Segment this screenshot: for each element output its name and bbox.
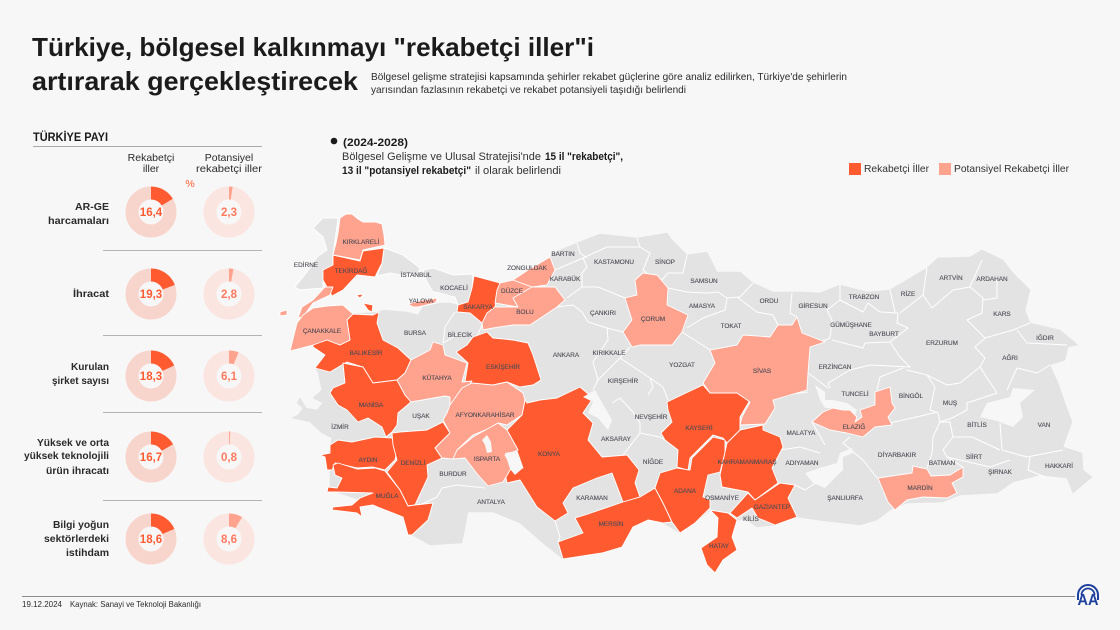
province: Kocaeli [423,268,473,305]
province name labels: MANİSA [359,400,384,409]
province: Elazığ [812,387,895,437]
province name labels: TUNCELİ [841,389,869,398]
province name labels: OSMANİYE [705,493,739,502]
callout: 2024-2028 strategy note: Bölgesel Gelişme ve Ulusal Stratejisi'nde [342,151,541,163]
province name labels: SAKARYA [463,304,494,311]
province name labels: ARTVİN [939,273,963,282]
legend: Rekabetçi İller [864,162,929,175]
row label: İhracat: İhracat [73,287,110,300]
province name labels: BİNGÖL [899,391,924,400]
lakes [482,385,1035,488]
province: Düzce [495,280,532,307]
donut: ihracat potansiyel 2,8: 2,8 [221,289,238,301]
donut: istihdam potansiyel 8,6: 8,6 [221,534,237,546]
province name labels: HAKKARİ [1045,461,1073,470]
row label: AR-GE harcamaları: harcamaları [48,215,109,227]
province name labels: UŞAK [412,413,430,420]
potential competitive provinces [280,214,963,510]
donut: AR-GE potansiyel 2,3: 2,3 [221,207,237,219]
row label: Bilgi yoğun sektörlerdeki istihdam: istihdam [66,547,109,559]
province: Aydın [320,437,397,470]
panel heading: TÜRKİYE PAYI [33,131,108,144]
column heading: potansiyel rekabetçi iller: Potansiyel [205,152,253,164]
donut: şirket potansiyel 6,1: 6,1 [221,371,238,383]
row label: Yüksek ve orta yüksek teknolojili ürün ihracatı: ürün ihracatı [46,465,109,477]
title: artırarak gerçekleştirecek [32,66,359,96]
province name labels: ESKİŞEHİR [486,362,520,371]
province: Mersin [558,488,672,559]
row label: Kurulan şirket sayısı: Kurulan [71,361,109,373]
province name labels: ERZURUM [926,340,958,347]
province name labels: GAZİANTEP [754,502,790,511]
province name labels: DÜZCE [501,287,523,295]
province name labels: ANTALYA [477,499,506,506]
province name labels: HATAY [709,543,730,550]
province name labels: KÜTAHYA [422,374,452,382]
province: Kütahya [397,342,472,405]
province: Muğla [327,463,433,535]
province name labels: TRABZON [849,294,880,301]
callout: 2024-2028 strategy note: (2024-2028) [343,137,408,149]
province name labels: KAYSERİ [685,423,713,432]
donut: istihdam potansiyel 8,6 [210,520,248,558]
province: Çanakkale Gelibolu [298,287,333,318]
title: Türkiye, bölgesel kalkınmayı "rekabetçi iller"i [32,32,594,62]
province name labels: VAN [1038,422,1051,429]
province name labels: KARAMAN [576,495,608,502]
province name labels: ELAZIĞ [843,422,865,431]
province name labels: BATMAN [929,460,955,467]
province name labels: IĞDIR [1036,333,1054,342]
province: Balıkesir [313,312,411,383]
province name labels: AFYONKARAHİSAR [456,410,515,419]
province: Mardin [878,466,963,510]
province name labels: NİĞDE [643,457,663,466]
donut: AR-GE rekabetçi 16,4: 16,4 [140,207,163,219]
province name labels: MUĞLA [376,491,399,500]
row label: Yüksek ve orta yüksek teknolojili ürün ihracatı: yüksek teknolojili [24,450,109,462]
province name labels: RİZE [901,289,915,298]
province name labels: ARDAHAN [976,276,1008,283]
province: Zonguldak [513,257,555,287]
column heading: rekabetçi iller: iller [143,163,160,175]
province name labels: ANKARA [553,352,580,359]
legend: Potansiyel Rekabetçi İller [954,162,1069,175]
panel: Türkiye payı [24,131,263,559]
province name labels: GİRESUN [798,301,828,310]
donut: şirket rekabetçi 18,3 [132,357,170,395]
province name labels: KIRIKKALE [592,350,626,357]
island: Marmara west [356,294,364,298]
province name labels: AKSARAY [601,436,632,443]
province name labels: İSTANBUL [401,270,432,279]
province name labels: AMASYA [689,303,716,310]
row label: AR-GE harcamaları [48,201,109,227]
province: Çanakkale [290,305,353,351]
donut: teknoloji rekabetçi 16,7 [132,438,170,476]
callout: 2024-2028 strategy note: 13 il "potansiyel rekabetçi" [342,165,471,177]
province name labels: KIRŞEHİR [608,376,638,385]
island: Gökçeada [280,310,287,316]
province name labels: ŞANLIURFA [827,495,863,502]
province name labels: DENİZLİ [401,458,425,467]
row label: Kurulan şirket sayısı: şirket sayısı [52,375,109,387]
province name labels: ÇANAKKALE [303,328,341,335]
province name labels: TEKİRDAĞ [335,266,367,275]
province: Çorum [623,273,688,347]
province name labels: MUŞ [943,400,957,407]
province name labels: KASTAMONU [594,259,634,266]
subtitle text block [371,72,847,96]
province name labels: ÇANKIRI [590,310,616,317]
province: Edirne [295,218,338,290]
donut: ihracat potansiyel 2,8 [210,275,248,313]
donut: şirket potansiyel 6,1 [210,357,248,395]
province name labels: ADIYAMAN [786,460,819,467]
province name labels: BAYBURT [869,331,899,338]
column heading: rekabetçi iller: Rekabetçi [128,152,174,164]
province name labels: İZMİR [331,422,349,431]
province: Gaziantep [730,483,797,525]
province name labels: BARTIN [551,251,575,258]
province name labels: GÜMÜŞHANE [830,321,872,329]
donut: ihracat rekabetçi 19,3: 19,3 [140,289,162,301]
province name labels: YOZGAT [669,362,695,369]
date and source: Kaynak: Sanayi ve Teknoloji Bakanlığı [70,600,201,609]
province name labels: AĞRI [1002,353,1018,362]
province: Kayseri [661,385,750,470]
province name labels: AYDIN [358,457,378,464]
subtitle text block: Bölgesel gelişme stratejisi kapsamında şehirler rekabet güçlerine göre analiz edilirken, Türkiye'de şehirlerin [371,72,847,83]
province name labels: BİLECİK [448,330,473,339]
title [32,32,594,96]
donut: AR-GE potansiyel 2,3 [210,193,248,231]
province name labels: TOKAT [721,323,741,330]
row label: Bilgi yoğun sektörlerdeki istihdam [44,519,109,559]
callout: 2024-2028 strategy note: il olarak belirlendi [475,165,561,177]
map base: gray provinces [292,218,1092,559]
province name labels: ORDU [760,298,779,305]
province: Yalova [408,298,438,307]
icon: AA logo: AA [1078,592,1098,609]
province name labels: SAMSUN [690,278,718,285]
donut: teknoloji potansiyel 0,8: 0,8 [221,452,238,464]
province name labels: MERSİN [599,519,624,528]
province name labels: KARS [993,311,1011,318]
province: Tekirdağ [323,248,384,296]
province name labels: KARABÜK [550,275,581,283]
province: Sakarya [457,276,500,323]
province name labels: ÇORUM [641,316,665,323]
province name labels: KİLİS [743,514,759,523]
province: Manisa [330,363,411,437]
icon: AA logo [1078,585,1098,609]
province name labels: EDİRNE [294,260,318,269]
donut: şirket rekabetçi 18,3: 18,3 [140,371,162,383]
percent sign: % [185,178,195,190]
donut: istihdam rekabetçi 18,6: 18,6 [140,534,162,546]
province name labels: ERZİNCAN [819,362,852,371]
province name labels: SİİRT [966,452,982,461]
subtitle text block: yarısından fazlasının rekabetçi ve rekabet potansiyeli taşıdığı belirlendi [371,85,686,96]
column heading: potansiyel rekabetçi iller: rekabetçi iller [196,163,263,175]
row label: AR-GE harcamaları: AR-GE [75,201,109,213]
date and source: 19.12.2024 [22,600,63,609]
province: Adana [655,437,725,533]
row label: Bilgi yoğun sektörlerdeki istihdam: sektörlerdeki [44,533,109,545]
province name labels: ŞIRNAK [988,469,1013,476]
province: Isparta [453,423,518,486]
column heading: rekabetçi iller [128,152,174,175]
province: Bolu [482,287,565,330]
province name labels: SİVAS [753,366,771,375]
footer [22,585,1098,609]
donut: ihracat rekabetçi 19,3 [132,275,170,313]
province: Denizli [387,422,450,506]
column heading: potansiyel rekabetçi iller [196,152,263,175]
province name labels: SİNOP [655,257,675,266]
row label: Yüksek ve orta yüksek teknolojili ürün ihracatı: Yüksek ve orta [37,437,109,449]
province name labels: KOCAELİ [440,283,468,292]
province name labels: BALIKESİR [349,348,383,357]
competitive provinces [313,248,797,573]
island: Marmara east [363,303,373,312]
province name labels: DİYARBAKIR [878,450,917,459]
province name labels: ISPARTA [474,456,501,463]
province name labels: ADANA [674,488,697,495]
province name labels: NEVŞEHİR [635,412,668,421]
donut: teknoloji potansiyel 0,8 [210,438,248,476]
province name labels: BURSA [404,330,427,337]
province name labels: YALOVA [409,298,434,305]
province name labels: MARDİN [907,483,933,492]
province: İstanbul [377,248,420,276]
map of Türkiye [280,214,1092,573]
province: Eskişehir [456,332,541,387]
province name labels: MALATYA [787,430,816,437]
province: Afyonkarahisar [435,382,525,459]
donut: AR-GE rekabetçi 16,4 [132,193,170,231]
province name labels: KIRKLARELİ [343,237,380,246]
row label: Bilgi yoğun sektörlerdeki istihdam: Bilgi yoğun [53,519,109,531]
province name labels: BURDUR [439,471,467,478]
legend [849,162,1069,175]
province: Konya [505,387,640,521]
donut: istihdam rekabetçi 18,6 [132,520,170,558]
province name labels [294,237,1073,550]
province name labels: BOLU [516,309,534,316]
province name labels: BİTLİS [967,420,987,429]
donut: teknoloji rekabetçi 16,7: 16,7 [140,452,162,464]
province: Kahramanmaraş [720,425,783,500]
row label: Yüksek ve orta yüksek teknolojili ürün ihracatı [24,437,109,477]
province: Hatay [701,510,737,573]
callout: 2024-2028 strategy note: 15 il "rekabetçi", [545,151,623,163]
callout: 2024-2028 strategy note [331,137,623,177]
province name labels: KAHRAMANMARAŞ [718,459,776,466]
province name labels: ZONGULDAK [507,265,548,272]
gray province borders [420,238,1067,542]
row label: Kurulan şirket sayısı [52,361,109,387]
province: Sivas [703,317,825,425]
province: Kırklareli [333,214,385,260]
province name labels: KONYA [538,451,561,458]
